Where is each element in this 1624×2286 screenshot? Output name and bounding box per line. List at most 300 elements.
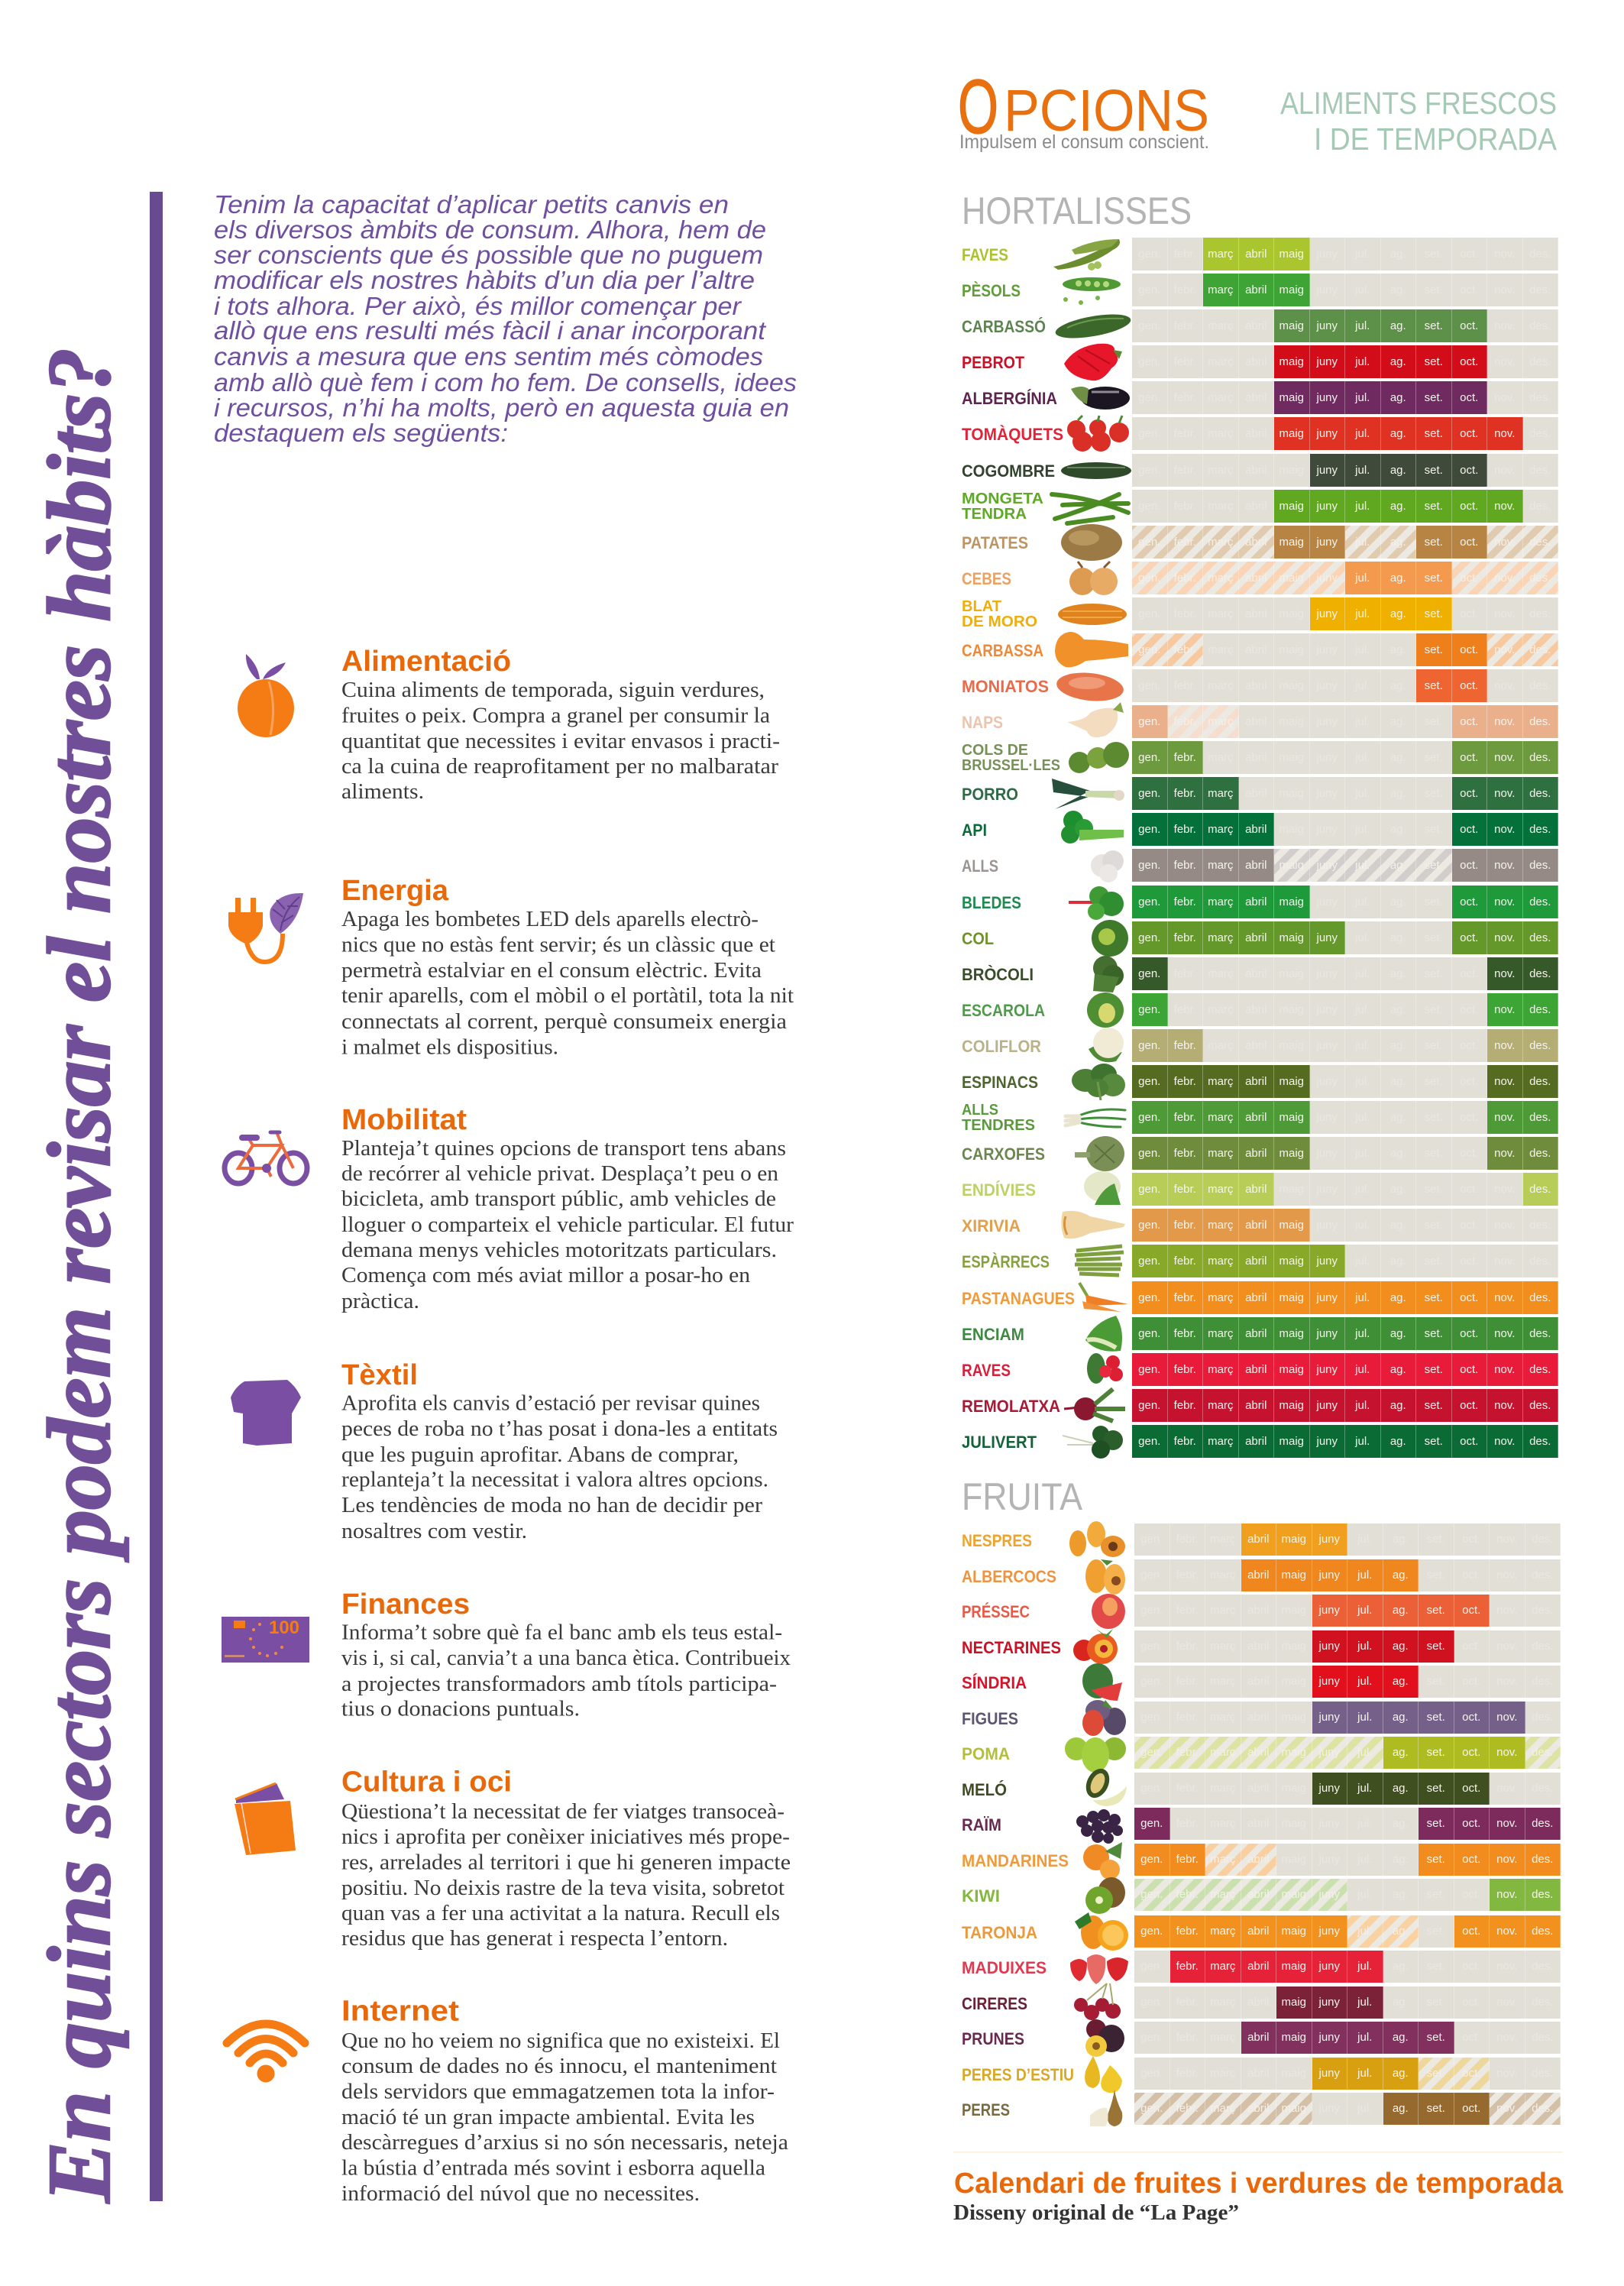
calendar: PORRO: jul. <box>1355 787 1370 800</box>
label: COLS DE BRUSSEL·LES <box>962 741 1076 774</box>
text: Internet <box>341 2029 788 2206</box>
calendar: API: març <box>1208 823 1233 836</box>
calendar: BRÒCOLI: abril <box>1245 967 1267 980</box>
calendar: PERES D'ESTIU: nov. <box>1496 2067 1517 2080</box>
row: COLS DE BRUSSEL·LES <box>962 741 1560 774</box>
label: MONGETA TENDRA <box>962 490 1076 523</box>
calendar: COGOMBRE: nov. <box>1494 464 1515 477</box>
label: XIRIVIA: XIRIVIA <box>962 1216 1021 1235</box>
calendar: SÍNDRIA: juny <box>1318 1675 1340 1688</box>
calendar: COGOMBRE: febr. <box>1174 464 1196 477</box>
calendar: KIWI: ag. <box>1393 1888 1409 1901</box>
calendar: MONGETA TENDRA: juny <box>1316 500 1338 513</box>
calendar: PERES: ag. <box>1393 2102 1409 2115</box>
calendar: CIRERES: set. <box>1427 1996 1445 2009</box>
calendar: PRUNES: gen. <box>1140 2031 1163 2044</box>
calendar: FIGUES: març <box>1210 1711 1235 1724</box>
calendar: PERES: oct. <box>1462 2102 1480 2115</box>
calendar: COGOMBRE <box>1132 454 1558 487</box>
calendar: ALBERGÍNIA: des. <box>1529 391 1551 404</box>
calendar: MELÓ: abril <box>1247 1782 1269 1795</box>
heading: Alimentació: Alimentació <box>341 646 511 678</box>
calendar: COLIFLOR: set. <box>1425 1039 1443 1052</box>
calendar: MONGETA TENDRA: març <box>1208 500 1233 513</box>
calendar: ESPINACS: abril <box>1245 1075 1267 1088</box>
calendar: TARONJA: oct. <box>1462 1925 1480 1938</box>
calendar: COLS DE BRUSSEL·LES: jul. <box>1355 751 1370 764</box>
icon: patates <box>1052 523 1131 562</box>
calendar: PATATES <box>1132 526 1558 559</box>
calendar: RAÏM: abril <box>1247 1817 1269 1830</box>
calendar: TOMÀQUETS <box>1132 417 1558 450</box>
calendar: NAPS: jul. <box>1355 715 1370 728</box>
calendar: REMOLATXA: nov. <box>1494 1399 1515 1412</box>
icon: bledes <box>1052 882 1131 921</box>
icon: coliflor <box>1052 1026 1131 1065</box>
calendar: MADUIXES: gen. <box>1140 1960 1163 1973</box>
calendar: ALBERGÍNIA: oct. <box>1460 391 1478 404</box>
calendar: ALLS TENDRES: abril <box>1245 1111 1267 1124</box>
icon: albergínia <box>1071 387 1130 410</box>
calendar: ALLS TENDRES: set. <box>1425 1111 1443 1124</box>
logo: OPCIONS <box>958 64 1209 153</box>
calendar: PRUNES: març <box>1210 2031 1235 2044</box>
calendar: NECTARINES: oct. <box>1462 1640 1480 1653</box>
calendar: MONGETA TENDRA: gen. <box>1138 500 1160 513</box>
icon: raïm <box>1052 1805 1131 1844</box>
text: Alimentació <box>341 678 780 804</box>
calendar: MONGETA TENDRA: ag. <box>1390 500 1406 513</box>
calendar: BLEDES: març <box>1208 895 1233 908</box>
calendar: COL: oct. <box>1460 931 1478 944</box>
calendar: PÈSOLS: juny <box>1316 283 1338 296</box>
label: REMOLATXA: REMOLATXA <box>962 1397 1060 1416</box>
calendar: MADUIXES: nov. <box>1496 1960 1517 1973</box>
calendar: PASTANAGUES: maig <box>1279 1291 1304 1304</box>
calendar: PERES: juny <box>1318 2102 1340 2115</box>
calendar: MELÓ: set. <box>1427 1782 1445 1795</box>
calendar: XIRIVIA: des. <box>1529 1219 1551 1232</box>
calendar: COGOMBRE: abril <box>1245 464 1267 477</box>
calendar: PASTANAGUES: març <box>1208 1291 1233 1304</box>
calendar: ENDÍVIES: jul. <box>1355 1183 1370 1196</box>
icon: síndria <box>1052 1663 1131 1702</box>
calendar: JULIVERT <box>1132 1425 1558 1458</box>
intro paragraph: i recursos, n’hi ha molts, però en aquesta guia en <box>214 393 789 422</box>
calendar: CEBES: jul. <box>1355 572 1370 584</box>
calendar: ALBERCOCS: maig <box>1281 1569 1306 1582</box>
calendar: CEBES: abril <box>1245 572 1267 584</box>
calendar: ESPÀRRECS: ag. <box>1390 1255 1406 1268</box>
heading: FRUITA: FRUITA <box>962 1475 1083 1518</box>
calendar: JULIVERT: ag. <box>1390 1435 1406 1448</box>
calendar: CARBASSÓ: jul. <box>1355 319 1370 332</box>
calendar: NAPS: maig <box>1279 715 1304 728</box>
row: COGOMBRE <box>962 454 1560 487</box>
calendar: BLEDES: juny <box>1316 895 1338 908</box>
calendar: ENDÍVIES: maig <box>1279 1183 1304 1196</box>
label: PASTANAGUES: PASTANAGUES <box>962 1289 1075 1308</box>
icon: orange fruit <box>238 654 294 737</box>
calendar: ALBERGÍNIA: set. <box>1425 391 1443 404</box>
calendar: ALBERGÍNIA: febr. <box>1174 391 1196 404</box>
calendar: PATATES: des. <box>1529 536 1551 549</box>
calendar: NECTARINES: gen. <box>1140 1640 1163 1653</box>
calendar: ESPINACS: jul. <box>1355 1075 1370 1088</box>
purple vertical bar <box>150 192 163 2201</box>
calendar: PRUNES: nov. <box>1496 2031 1517 2044</box>
calendar: PRÉSSEC: set. <box>1427 1604 1445 1617</box>
calendar: PERES D'ESTIU: gen. <box>1140 2067 1163 2080</box>
calendar: ENCIAM: des. <box>1529 1327 1551 1340</box>
calendar: XIRIVIA: febr. <box>1174 1219 1196 1232</box>
calendar: FAVES: febr. <box>1174 248 1196 261</box>
calendar: BLAT DE MORO: nov. <box>1494 607 1515 620</box>
calendar: MONIATOS: oct. <box>1460 679 1478 692</box>
calendar: MADUIXES: jul. <box>1357 1960 1372 1973</box>
icon: carxofes <box>1052 1134 1131 1173</box>
calendar: ESPINACS: set. <box>1425 1075 1443 1088</box>
calendar: RAVES: oct. <box>1460 1363 1478 1376</box>
intro paragraph <box>214 190 797 447</box>
icon: raves <box>1052 1350 1131 1389</box>
calendar: PASTANAGUES: jul. <box>1355 1291 1370 1304</box>
text: Tèxtil: replanteja’t la necessitat i valora altres opcions. <box>341 1467 768 1491</box>
label: PORRO: PORRO <box>962 785 1018 804</box>
calendar: NECTARINES: març <box>1210 1640 1235 1653</box>
icon: cols de Brussel·les <box>1052 738 1131 777</box>
calendar: COGOMBRE: oct. <box>1460 464 1478 477</box>
calendar: PRUNES: febr. <box>1176 2031 1199 2044</box>
calendar: TARONJA <box>1134 1915 1561 1948</box>
row: ALLS TENDRES <box>962 1101 1560 1134</box>
icon: espàrrecs <box>1052 1242 1131 1281</box>
label: CIRERES: CIRERES <box>962 1994 1027 2013</box>
calendar: SÍNDRIA: febr. <box>1176 1675 1199 1688</box>
calendar: ALLS TENDRES: juny <box>1316 1111 1338 1124</box>
calendar: MANDARINES: ag. <box>1393 1853 1409 1866</box>
label: CEBES: CEBES <box>962 569 1011 588</box>
calendar: MANDARINES: jul. <box>1357 1853 1372 1866</box>
calendar: CIRERES: maig <box>1281 1996 1306 2009</box>
calendar: PEBROT: maig <box>1279 355 1304 368</box>
calendar: ALLS: ag. <box>1390 859 1406 872</box>
calendar: COL: juny <box>1316 931 1338 944</box>
calendar: MONIATOS: nov. <box>1494 679 1515 692</box>
calendar: MONIATOS: febr. <box>1174 679 1196 692</box>
calendar: PATATES: set. <box>1425 536 1443 549</box>
calendar: CARBASSÓ: oct. <box>1460 319 1478 332</box>
label: COLS DE BRUSSEL·LES: COLS DE <box>962 742 1028 759</box>
calendar: PEBROT: febr. <box>1174 355 1196 368</box>
calendar: COLS DE BRUSSEL·LES <box>1132 741 1558 774</box>
calendar: TARONJA: maig <box>1281 1925 1306 1938</box>
calendar: CARBASSÓ: març <box>1208 319 1233 332</box>
calendar: BLAT DE MORO: ag. <box>1390 607 1406 620</box>
calendar: ESPINACS: des. <box>1529 1075 1551 1088</box>
calendar: BLAT DE MORO: març <box>1208 607 1233 620</box>
calendar: COL: jul. <box>1355 931 1370 944</box>
icon: espinacs <box>1052 1062 1131 1101</box>
icon: endívies <box>1052 1170 1131 1209</box>
calendar: CARBASSA: juny <box>1316 643 1338 656</box>
calendar: CARBASSA: nov. <box>1494 643 1515 656</box>
calendar: MANDARINES: juny <box>1318 1853 1340 1866</box>
calendar: COGOMBRE: ag. <box>1390 464 1406 477</box>
calendar: PERES D'ESTIU: jul. <box>1357 2067 1372 2080</box>
calendar: ENCIAM: maig <box>1279 1327 1304 1340</box>
calendar: PÈSOLS: oct. <box>1460 283 1478 296</box>
calendar: PEBROT: gen. <box>1138 355 1160 368</box>
calendar: JULIVERT: set. <box>1425 1435 1443 1448</box>
row: MANDARINES <box>962 1844 1560 1876</box>
calendar: COLS DE BRUSSEL·LES: març <box>1208 751 1233 764</box>
calendar: BRÒCOLI: set. <box>1425 967 1443 980</box>
calendar: MELÓ: juny <box>1318 1782 1340 1795</box>
calendar: CARBASSA: jul. <box>1355 643 1370 656</box>
calendar: PERES: des. <box>1532 2102 1553 2115</box>
calendar: RAÏM: ag. <box>1393 1817 1409 1830</box>
calendar: NAPS: febr. <box>1174 715 1196 728</box>
icon: naps <box>1052 702 1131 741</box>
label: CARXOFES: CARXOFES <box>962 1145 1045 1164</box>
calendar: PRÉSSEC: des. <box>1532 1604 1553 1617</box>
calendar: BLEDES: ag. <box>1390 895 1406 908</box>
calendar: CIRERES: des. <box>1532 1996 1553 2009</box>
calendar: PERES <box>1134 2093 1561 2125</box>
icon: pèsols <box>1063 277 1121 305</box>
label: MONGETA TENDRA: MONGETA <box>962 491 1043 507</box>
calendar: REMOLATXA: febr. <box>1174 1399 1196 1412</box>
calendar: PERES D'ESTIU: maig <box>1281 2067 1306 2080</box>
icon: faves <box>1053 239 1120 270</box>
calendar: RAÏM: set. <box>1427 1817 1445 1830</box>
calendar: MANDARINES: oct. <box>1462 1853 1480 1866</box>
text: Mobilitat: lloguer o comparteix el vehicle particular. El futur <box>341 1213 794 1237</box>
calendar: KIWI: maig <box>1281 1888 1306 1901</box>
calendar: RAÏM: gen. <box>1140 1817 1163 1830</box>
calendar: SÍNDRIA: abril <box>1247 1675 1269 1688</box>
calendar: ENDÍVIES: abril <box>1245 1183 1267 1196</box>
calendar: NESPRES: ag. <box>1393 1533 1409 1546</box>
calendar: ALLS TENDRES: març <box>1208 1111 1233 1124</box>
heading: Mobilitat: Mobilitat <box>341 1104 467 1136</box>
calendar: ALLS: març <box>1208 859 1233 872</box>
intro paragraph: i tots alhora. Per això, és millor començar per <box>214 292 742 320</box>
calendar: COLIFLOR <box>1132 1029 1558 1062</box>
row: FIGUES <box>962 1702 1560 1734</box>
calendar: MONIATOS: ag. <box>1390 679 1406 692</box>
calendar: ENCIAM: gen. <box>1138 1327 1160 1340</box>
calendar: RAVES: jul. <box>1355 1363 1370 1376</box>
icon: wifi <box>227 2024 305 2078</box>
calendar: ALLS TENDRES: nov. <box>1494 1111 1515 1124</box>
row: COLIFLOR <box>962 1029 1560 1062</box>
calendar: PATATES: jul. <box>1355 536 1370 549</box>
text: Mobilitat <box>341 1136 794 1313</box>
icon: remolatxa <box>1052 1386 1131 1425</box>
calendar: BLEDES: abril <box>1245 895 1267 908</box>
calendar: ESPINACS: ag. <box>1390 1075 1406 1088</box>
calendar: COLIFLOR: gen. <box>1138 1039 1160 1052</box>
icon: cireres <box>1052 1983 1131 2022</box>
icon: albercocs <box>1052 1556 1131 1595</box>
calendar: PERES: maig <box>1281 2102 1306 2115</box>
calendar: RAVES: març <box>1208 1363 1233 1376</box>
calendar: FIGUES <box>1134 1702 1561 1734</box>
calendar: PEBROT: jul. <box>1355 355 1370 368</box>
calendar: MONGETA TENDRA: nov. <box>1494 500 1515 513</box>
calendar: NESPRES: set. <box>1427 1533 1445 1546</box>
calendar: MANDARINES <box>1134 1844 1561 1876</box>
calendar: PRÉSSEC: jul. <box>1357 1604 1372 1617</box>
calendar: BRÒCOLI: maig <box>1279 967 1304 980</box>
calendar: XIRIVIA: set. <box>1425 1219 1443 1232</box>
calendar: TOMÀQUETS: ag. <box>1390 427 1406 440</box>
calendar: ESPÀRRECS: març <box>1208 1255 1233 1268</box>
label: JULIVERT: JULIVERT <box>962 1433 1037 1452</box>
calendar: ENCIAM: jul. <box>1355 1327 1370 1340</box>
label: ALLS TENDRES <box>962 1101 1076 1134</box>
calendar: XIRIVIA: maig <box>1279 1219 1304 1232</box>
calendar: RAVES: febr. <box>1174 1363 1196 1376</box>
calendar: API: des. <box>1529 823 1551 836</box>
calendar: ENCIAM: febr. <box>1174 1327 1196 1340</box>
calendar: MELÓ: març <box>1210 1782 1235 1795</box>
calendar: TARONJA: gen. <box>1140 1925 1163 1938</box>
calendar: ENDÍVIES: oct. <box>1460 1183 1478 1196</box>
calendar: KIWI: oct. <box>1462 1888 1480 1901</box>
calendar: PÈSOLS: maig <box>1279 283 1304 296</box>
calendar: PORRO: nov. <box>1494 787 1515 800</box>
calendar: NESPRES <box>1134 1523 1561 1556</box>
row: ESCAROLA <box>962 993 1560 1026</box>
text: Finances: Informa’t sobre què fa el banc amb els teus estal- <box>341 1620 782 1644</box>
icon: book <box>235 1783 296 1855</box>
calendar: ALBERCOCS <box>1134 1559 1561 1591</box>
calendar: ENDÍVIES: febr. <box>1174 1183 1196 1196</box>
calendar: KIWI <box>1134 1879 1561 1911</box>
calendar: COLS DE BRUSSEL·LES: juny <box>1316 751 1338 764</box>
calendar: BRÒCOLI <box>1132 957 1558 990</box>
calendar: ESPÀRRECS: juny <box>1316 1255 1338 1268</box>
calendar: CARBASSÓ: abril <box>1245 319 1267 332</box>
calendar: CARBASSA: des. <box>1529 643 1551 656</box>
label: RAÏM: RAÏM <box>962 1815 1001 1834</box>
calendar: COLS DE BRUSSEL·LES: oct. <box>1460 751 1478 764</box>
label: MONGETA TENDRA: TENDRA <box>962 506 1027 523</box>
calendar: CIRERES: febr. <box>1176 1996 1199 2009</box>
label: MADUIXES: MADUIXES <box>962 1958 1047 1977</box>
calendar: RAVES: nov. <box>1494 1363 1515 1376</box>
calendar: MONIATOS: set. <box>1425 679 1443 692</box>
text: Energia: permetrà estalviar en el consum elèctric. Evita <box>341 958 762 983</box>
calendar: CEBES: nov. <box>1494 572 1515 584</box>
calendar: ALBERCOCS: set. <box>1427 1569 1445 1582</box>
calendar: JULIVERT: febr. <box>1174 1435 1196 1448</box>
calendar: MADUIXES: set. <box>1427 1960 1445 1973</box>
label: BLEDES: BLEDES <box>962 893 1021 912</box>
calendar: MANDARINES: set. <box>1427 1853 1445 1866</box>
calendar: MANDARINES: des. <box>1532 1853 1553 1866</box>
calendar: FIGUES: jul. <box>1357 1711 1372 1724</box>
calendar: ESCAROLA: juny <box>1316 1003 1338 1016</box>
calendar: ALBERGÍNIA: gen. <box>1138 391 1160 404</box>
logo: OPCIONS: Impulsem el consum conscient. <box>959 131 1209 153</box>
calendar: CARBASSA: març <box>1208 643 1233 656</box>
calendar: NAPS: set. <box>1425 715 1443 728</box>
calendar: PERES: nov. <box>1496 2102 1517 2115</box>
calendar: PRUNES: jul. <box>1357 2031 1372 2044</box>
label: ALLS: ALLS <box>962 856 998 876</box>
calendar: PASTANAGUES <box>1132 1281 1558 1314</box>
calendar: RAVES: des. <box>1529 1363 1551 1376</box>
calendar: PRUNES <box>1134 2022 1561 2054</box>
calendar: ALBERCOCS: març <box>1210 1569 1235 1582</box>
calendar: POMA: maig <box>1281 1746 1306 1759</box>
calendar: MANDARINES: gen. <box>1140 1853 1163 1866</box>
calendar: COLS DE BRUSSEL·LES: febr. <box>1174 751 1196 764</box>
calendar: ALLS: febr. <box>1174 859 1196 872</box>
label: MANDARINES: MANDARINES <box>962 1851 1069 1870</box>
calendar: NESPRES: jul. <box>1357 1533 1372 1546</box>
calendar: KIWI: abril <box>1247 1888 1269 1901</box>
label: ESPINACS: ESPINACS <box>962 1073 1038 1092</box>
intro paragraph: amb allò què fem i com ho fem. De consells, idees <box>214 368 797 397</box>
calendar: ESPÀRRECS: nov. <box>1494 1255 1515 1268</box>
calendar: MELÓ <box>1134 1773 1561 1805</box>
row: CARBASSA <box>962 633 1560 666</box>
row: MADUIXES <box>962 1951 1560 1983</box>
calendar: ALBERGÍNIA: nov. <box>1494 391 1515 404</box>
calendar: PRUNES: maig <box>1281 2031 1306 2044</box>
calendar: COLIFLOR: maig <box>1279 1039 1304 1052</box>
calendar: JULIVERT: des. <box>1529 1435 1551 1448</box>
calendar: BLAT DE MORO: set. <box>1425 607 1443 620</box>
calendar: PRÉSSEC: gen. <box>1140 1604 1163 1617</box>
row: PÈSOLS <box>962 274 1558 306</box>
calendar: ESPÀRRECS: abril <box>1245 1255 1267 1268</box>
calendar: MADUIXES: maig <box>1281 1960 1306 1973</box>
calendar: MANDARINES: abril <box>1247 1853 1269 1866</box>
calendar: POMA: febr. <box>1176 1746 1199 1759</box>
calendar: PEBROT: oct. <box>1460 355 1478 368</box>
row: TARONJA <box>962 1915 1560 1948</box>
text: Cultura i oci: quan vas a fer una activitat a la natura. Recull els <box>341 1901 780 1925</box>
calendar: PORRO: des. <box>1529 787 1551 800</box>
calendar: PÈSOLS: ag. <box>1390 283 1406 296</box>
text: Finances: a projectes transformadors amb títols participa- <box>341 1672 777 1696</box>
heading: aliments frescos <box>1280 86 1558 157</box>
calendar: PORRO <box>1132 777 1558 810</box>
calendar: COL: març <box>1208 931 1233 944</box>
calendar: MONGETA TENDRA: oct. <box>1460 500 1478 513</box>
logo: OPCIONS: O <box>958 64 998 150</box>
calendar: ESCAROLA: ag. <box>1390 1003 1406 1016</box>
calendar: TOMÀQUETS: oct. <box>1460 427 1478 440</box>
calendar: CARBASSA: oct. <box>1460 643 1478 656</box>
calendar: API: set. <box>1425 823 1443 836</box>
calendar: BLEDES: des. <box>1529 895 1551 908</box>
calendar: PRÉSSEC <box>1134 1595 1561 1627</box>
row: ALLS <box>962 849 1560 882</box>
calendar: COL <box>1132 921 1558 954</box>
calendar: RAVES: juny <box>1316 1363 1338 1376</box>
text: Internet: dels servidors que emmagatzemen tota la infor- <box>341 2080 775 2104</box>
calendar: ALBERCOCS: nov. <box>1496 1569 1517 1582</box>
calendar: PASTANAGUES: abril <box>1245 1291 1267 1304</box>
calendar: ENDÍVIES: juny <box>1316 1183 1338 1196</box>
